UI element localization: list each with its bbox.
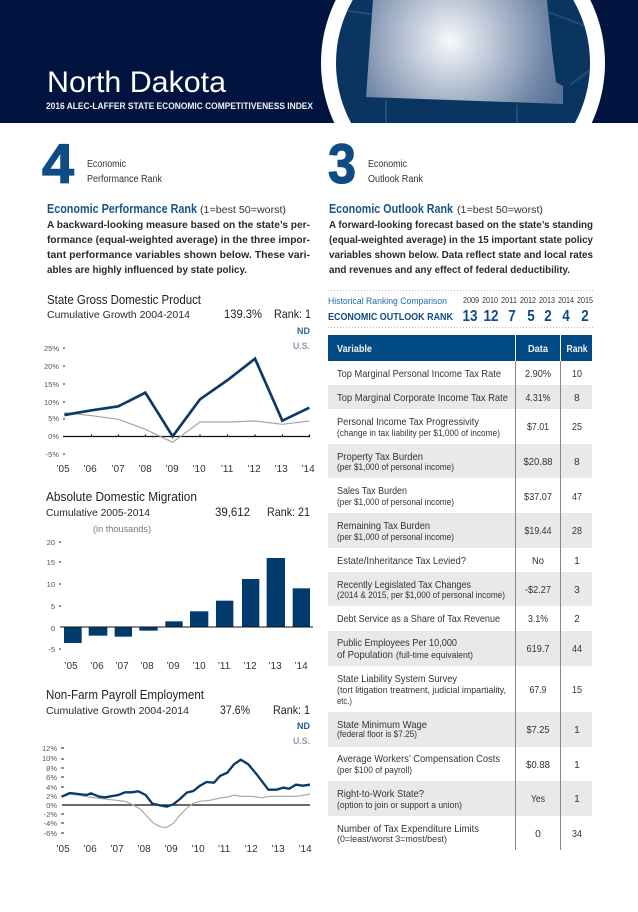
table header: Rank — [566, 343, 588, 355]
row: state liability survey — [337, 673, 582, 706]
row: state liability survey: State Liability System Survey — [337, 673, 458, 685]
text block: performance rank description: tant performance variables shown below. These vari- — [47, 249, 310, 261]
row: recently legislated tax changes: -$2.27 — [525, 585, 551, 596]
chart: non-farm payroll employment: 12% — [42, 744, 57, 753]
chart: non-farm payroll employment: Cumulative Growth 2004-2014 — [46, 705, 189, 717]
rank: economic performance: Economic — [87, 159, 126, 170]
row: tax expenditure limits — [337, 823, 582, 844]
chart: absolute domestic migration: ’14 — [294, 661, 308, 672]
chart: non-farm payroll employment: ’12 — [244, 844, 258, 855]
row: state liability survey: etc.) — [337, 696, 352, 706]
chart: absolute domestic migration: 20 — [47, 538, 55, 547]
chart: state gross domestic product: ’13 — [274, 464, 288, 475]
row: property tax burden: $20.88 — [524, 457, 553, 468]
row: tax progressivity: $7.01 — [527, 422, 549, 433]
row: tax expenditure limits: 34 — [572, 829, 582, 840]
row: public employees: 619.7 — [526, 644, 550, 655]
row: recently legislated tax changes: 3 — [574, 585, 580, 596]
text block: outlook rank description: (equal-weighted average) in the 15 important state policy — [329, 234, 593, 246]
chart: state gross domestic product: ’09 — [165, 464, 179, 475]
chart: state gross domestic product: ’07 — [111, 464, 125, 475]
historical ranking comparison: 2014 — [558, 296, 574, 305]
row: right to work — [337, 788, 580, 810]
historical ranking comparison: Historical Ranking Comparison — [328, 296, 447, 307]
chart: non-farm payroll employment: Non-Farm Payroll Employment — [46, 688, 204, 702]
title: North Dakota — [47, 66, 226, 99]
row: minimum wage: $7.25 — [526, 725, 550, 736]
chart: absolute domestic migration: Absolute Domestic Migration — [46, 490, 197, 504]
chart: absolute domestic migration: ’13 — [268, 661, 282, 672]
chart: state gross domestic product: State Gross Domestic Product — [47, 293, 201, 307]
chart: state gross domestic product: ’05 — [56, 464, 70, 475]
chart: non-farm payroll employment: 6% — [46, 773, 57, 782]
historical ranking comparison: 2009 — [463, 296, 479, 305]
row: state liability survey: 67.9 — [530, 685, 547, 696]
historical ranking comparison: 5 — [527, 308, 535, 325]
row: remaining tax burden — [337, 520, 582, 542]
historical ranking comparison: 4 — [562, 308, 570, 325]
text block: performance rank description: formance (equal-weighted average) in the three impor- — [47, 234, 310, 246]
chart: absolute domestic migration: ’11 — [218, 661, 231, 672]
row: right to work: (option to join or support a union) — [337, 800, 462, 810]
text block: performance rank description: Economic Performance Rank — [47, 202, 197, 216]
row: public employees: 44 — [572, 644, 582, 655]
row: remaining tax burden: 28 — [572, 526, 582, 537]
historical ranking comparison: 12 — [484, 308, 498, 325]
chart: non-farm payroll employment: 8% — [46, 764, 57, 773]
historical ranking comparison: 2013 — [539, 296, 555, 305]
row: property tax burden: (per $1,000 of personal income) — [337, 462, 454, 472]
chart: state gross domestic product: ND — [297, 326, 310, 337]
row: tax progressivity: 25 — [572, 422, 582, 433]
row: recently legislated tax changes — [337, 579, 580, 600]
row: debt service: 2 — [574, 614, 580, 625]
chart: non-farm payroll employment: U.S. — [293, 736, 310, 747]
row: tax progressivity: Personal Income Tax Progressivity — [337, 416, 480, 428]
chart: non-farm payroll employment: ’13 — [271, 844, 285, 855]
text block: performance rank description: (1=best 50=worst) — [200, 205, 286, 216]
chart: absolute domestic migration: 10 — [47, 580, 55, 589]
text block: performance rank description — [47, 202, 310, 276]
text block: performance rank description: ables are highly influenced by state policy. — [47, 264, 247, 276]
chart: non-farm payroll employment: ’07 — [110, 844, 124, 855]
chart: non-farm payroll employment: ’06 — [83, 844, 97, 855]
row: corporate income tax rate: 4.31% — [526, 393, 550, 404]
chart: state gross domestic product: 20% — [44, 362, 59, 371]
chart: state gross domestic product: ’10 — [192, 464, 206, 475]
row: property tax burden: 8 — [574, 457, 580, 468]
row: estate tax: 1 — [574, 556, 580, 567]
row: tax progressivity — [337, 416, 582, 438]
chart: non-farm payroll employment: ’09 — [164, 844, 178, 855]
row: public employees: of Population — [337, 649, 393, 661]
chart: absolute domestic migration: Cumulative 2005-2014 — [46, 507, 150, 519]
chart: absolute domestic migration: 0 — [51, 624, 55, 633]
chart: non-farm payroll employment: 4% — [46, 783, 57, 792]
historical ranking comparison — [328, 290, 593, 328]
chart: state gross domestic product: 5% — [48, 414, 59, 423]
row: tax expenditure limits: (0=least/worst 3=most/best) — [337, 834, 447, 844]
chart: absolute domestic migration: ’06 — [90, 661, 104, 672]
row: state liability survey: (tort litigation treatment, judicial impartiality, — [337, 685, 506, 695]
row: debt service: Debt Service as a Share of Tax Revenue — [337, 613, 500, 625]
rank: economic outlook: Economic — [368, 159, 407, 170]
chart: absolute domestic migration: ’10 — [192, 661, 206, 672]
row: tax expenditure limits: Number of Tax Expenditure Limits — [337, 823, 479, 835]
text block: outlook rank description: (1=best 50=worst) — [457, 205, 543, 216]
chart: non-farm payroll employment: 37.6% — [220, 703, 250, 717]
rank: economic outlook: Outlook Rank — [368, 174, 424, 185]
chart: non-farm payroll employment — [42, 688, 312, 855]
historical ranking comparison: 2015 — [577, 296, 593, 305]
chart: absolute domestic migration: 15 — [47, 558, 55, 567]
chart: non-farm payroll employment: -6% — [44, 829, 57, 838]
historical ranking comparison: 2012 — [520, 296, 536, 305]
chart: non-farm payroll employment: 10% — [42, 754, 57, 763]
row: public employees — [337, 637, 582, 661]
row: personal income tax rate: 2.90% — [525, 369, 551, 380]
row: personal income tax rate: Top Marginal Personal Income Tax Rate — [337, 368, 501, 380]
row: corporate income tax rate: Top Marginal Corporate Income Tax Rate — [337, 392, 508, 404]
chart: state gross domestic product: 0% — [48, 432, 59, 441]
chart: state gross domestic product — [44, 293, 315, 475]
chart: state gross domestic product: U.S. — [293, 341, 310, 352]
row: debt service: 3.1% — [528, 614, 548, 625]
table header: Variable — [337, 343, 372, 355]
chart: state gross domestic product: 25% — [44, 344, 59, 353]
chart: non-farm payroll employment: ’05 — [56, 844, 70, 855]
rank: economic performance: 4 — [42, 132, 74, 195]
row: workers compensation: (per $100 of payroll) — [337, 765, 412, 775]
chart: state gross domestic product: ’06 — [83, 464, 97, 475]
row: public employees: (full-time equivalent) — [396, 650, 473, 660]
historical ranking comparison: 2011 — [501, 296, 518, 305]
row: estate tax — [337, 555, 580, 567]
chart: non-farm payroll employment: ’10 — [191, 844, 205, 855]
row: right to work: 1 — [574, 794, 580, 805]
chart: absolute domestic migration: ’07 — [115, 661, 129, 672]
row: minimum wage: State Minimum Wage — [337, 719, 427, 731]
chart: state gross domestic product: Rank: 1 — [274, 307, 311, 321]
row: workers compensation — [337, 753, 580, 775]
row: sales tax burden: 47 — [572, 492, 582, 503]
row: minimum wage: (federal floor is $7.25) — [337, 729, 417, 739]
chart: non-farm payroll employment: 2% — [46, 792, 57, 801]
rank: economic performance: Performance Rank — [87, 174, 163, 185]
historical ranking comparison: 7 — [508, 308, 516, 325]
chart: absolute domestic migration: 39,612 — [215, 505, 250, 519]
row: remaining tax burden: (per $1,000 of personal income) — [337, 532, 454, 542]
header banner — [0, 0, 638, 123]
row: property tax burden: Property Tax Burden — [337, 451, 423, 463]
row: sales tax burden: Sales Tax Burden — [337, 485, 407, 497]
row: sales tax burden: (per $1,000 of personal income) — [337, 497, 454, 507]
row: corporate income tax rate: 8 — [574, 393, 580, 404]
chart: state gross domestic product: ’08 — [138, 464, 152, 475]
row: workers compensation: $0.88 — [526, 760, 550, 771]
chart: non-farm payroll employment: ND — [297, 721, 310, 732]
rank: economic outlook — [328, 132, 424, 195]
chart: state gross domestic product: 10% — [44, 398, 59, 407]
row: remaining tax burden: $19.44 — [524, 526, 552, 537]
chart: non-farm payroll employment: ’11 — [218, 844, 231, 855]
chart: state gross domestic product: ’11 — [221, 464, 234, 475]
icon: state map in circle — [321, 0, 605, 123]
row: sales tax burden — [337, 485, 582, 507]
table header — [328, 335, 592, 361]
text block: outlook rank description: and revenues and any effect of federal deductibility. — [329, 264, 570, 276]
chart: state gross domestic product: Cumulative Growth 2004-2014 — [47, 309, 190, 321]
chart: absolute domestic migration: ’09 — [166, 661, 180, 672]
chart: non-farm payroll employment: -4% — [44, 819, 57, 828]
row: tax expenditure limits: 0 — [535, 829, 541, 840]
chart: non-farm payroll employment: 0% — [46, 801, 57, 810]
row: estate tax: Estate/Inheritance Tax Levied? — [337, 555, 466, 567]
table: outlook variables — [328, 335, 592, 850]
historical ranking comparison: 2 — [544, 308, 552, 325]
chart: absolute domestic migration: ’05 — [64, 661, 78, 672]
chart: state gross domestic product: 139.3% — [224, 307, 262, 321]
chart: absolute domestic migration: Rank: 21 — [267, 505, 310, 519]
subtitle: 2016 ALEC-LAFFER STATE ECONOMIC COMPETITIVENESS INDEX — [46, 101, 314, 112]
row: recently legislated tax changes: (2014 & 2015, per $1,000 of personal income) — [337, 590, 505, 600]
rank: economic performance — [42, 132, 163, 195]
historical ranking comparison: 13 — [462, 308, 478, 325]
text block: performance rank description: A backward-looking measure based on the state’s per- — [47, 219, 310, 231]
chart: non-farm payroll employment: ’08 — [137, 844, 151, 855]
text block: outlook rank description — [329, 202, 593, 276]
chart: non-farm payroll employment: Rank: 1 — [273, 703, 310, 717]
row: workers compensation: Average Workers’ Compensation Costs — [337, 753, 500, 765]
row: minimum wage — [337, 719, 580, 739]
text block: outlook rank description: variables shown below. Data reflect state and local rates — [329, 249, 593, 261]
chart: state gross domestic product: 15% — [44, 380, 59, 389]
row: sales tax burden: $37.07 — [524, 492, 552, 503]
row: minimum wage: 1 — [574, 725, 580, 736]
historical ranking comparison: 2 — [581, 308, 589, 325]
chart: absolute domestic migration: 5 — [51, 602, 55, 611]
row: tax progressivity: (change in tax liability per $1,000 of income) — [337, 428, 500, 438]
row: estate tax: No — [532, 556, 544, 567]
chart: absolute domestic migration: ’08 — [140, 661, 154, 672]
row: property tax burden — [337, 451, 580, 472]
rank: economic outlook: 3 — [328, 132, 356, 195]
row: right to work: Right-to-Work State? — [337, 788, 424, 800]
chart: absolute domestic migration: -5 — [48, 645, 55, 654]
chart: absolute domestic migration: ’12 — [243, 661, 257, 672]
historical ranking comparison: ECONOMIC OUTLOOK RANK — [328, 311, 453, 323]
row: remaining tax burden: Remaining Tax Burden — [337, 520, 430, 532]
text block: outlook rank description: A forward-looking forecast based on the state’s standing — [329, 219, 593, 231]
table header: Data — [528, 343, 548, 355]
row: recently legislated tax changes: Recently Legislated Tax Changes — [337, 579, 471, 591]
row: right to work: Yes — [531, 794, 545, 805]
text block: outlook rank description: Economic Outlook Rank — [329, 202, 453, 216]
row: public employees: Public Employees Per 10,000 — [337, 637, 457, 649]
chart: state gross domestic product: ’12 — [247, 464, 261, 475]
row: workers compensation: 1 — [574, 760, 580, 771]
chart: absolute domestic migration: (in thousands) — [93, 524, 151, 535]
chart: absolute domestic migration — [46, 490, 313, 672]
historical ranking comparison: 2010 — [482, 296, 498, 305]
chart: state gross domestic product: -5% — [46, 450, 59, 459]
chart: non-farm payroll employment: ’14 — [298, 844, 312, 855]
chart: non-farm payroll employment: -2% — [44, 810, 57, 819]
row: state liability survey: 15 — [572, 685, 582, 696]
row: personal income tax rate: 10 — [572, 369, 582, 380]
chart: state gross domestic product: ’14 — [301, 464, 315, 475]
